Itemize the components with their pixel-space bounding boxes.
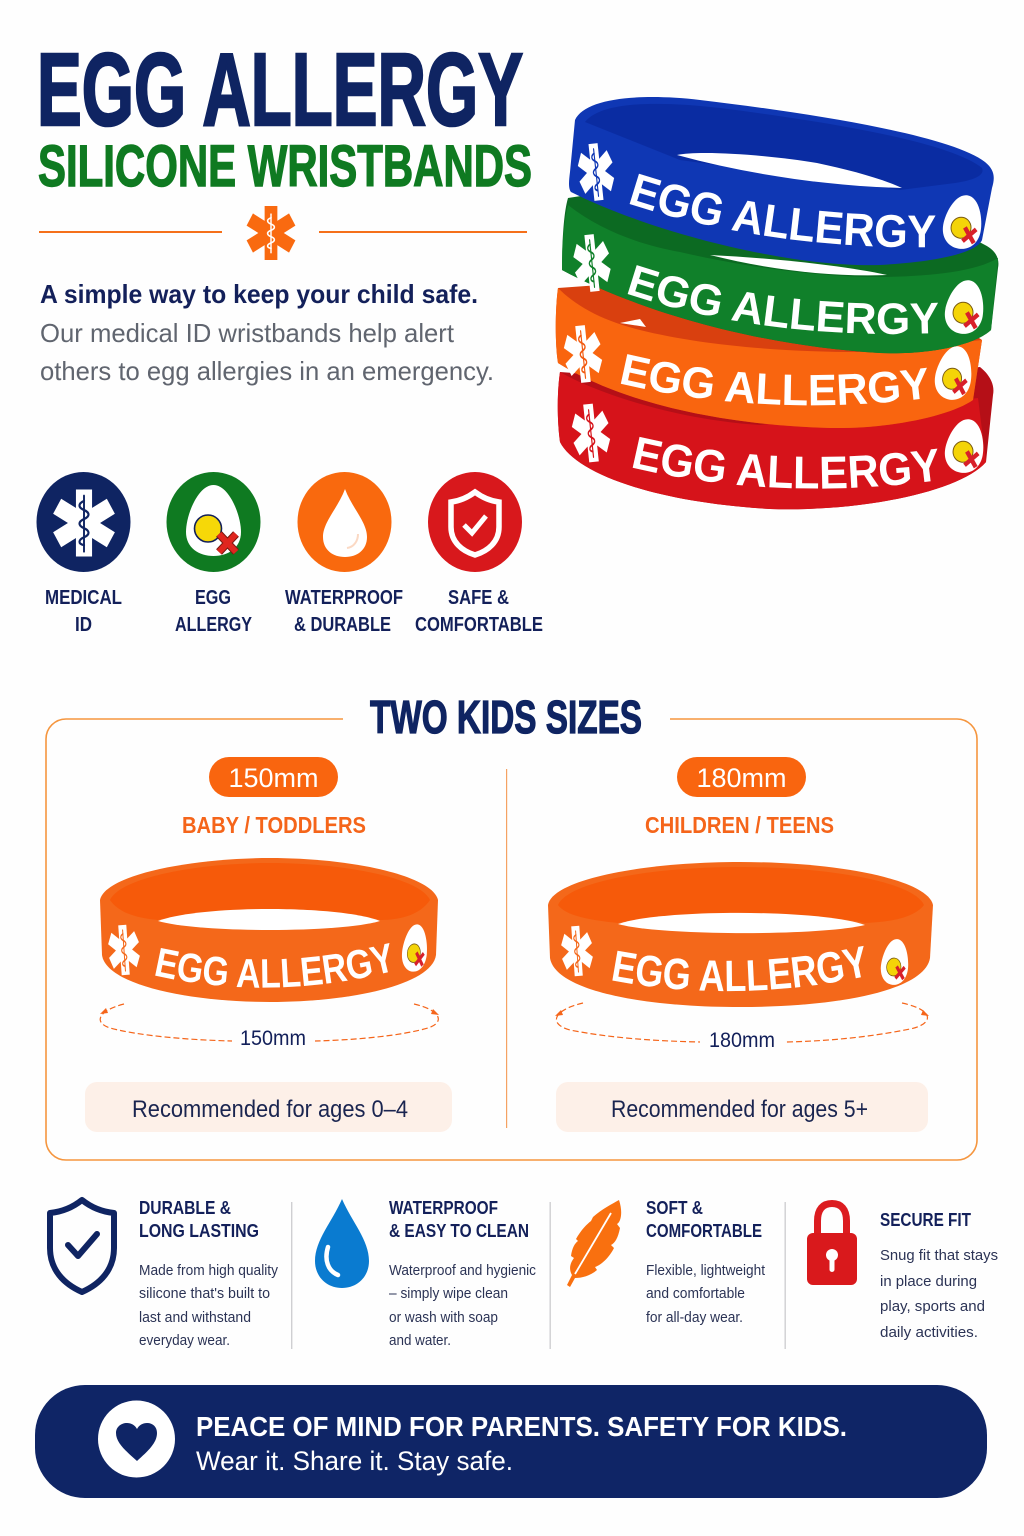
icon: waterproof bbox=[298, 472, 392, 572]
text: soft bbox=[646, 1198, 766, 1326]
text: waterproof: – simply wipe clean bbox=[389, 1285, 508, 1302]
recommendation: ages 0-4 bbox=[85, 1082, 452, 1132]
orange wristband bbox=[556, 286, 982, 428]
label: egg allergy bbox=[175, 587, 253, 636]
text: secure fit: daily activities. bbox=[880, 1324, 978, 1341]
label: children teens: CHILDREN / TEENS bbox=[645, 812, 834, 838]
size option: 180mm bbox=[548, 757, 933, 1132]
pill: 150mm: 150mm bbox=[228, 763, 319, 793]
recommendation: ages 5+ bbox=[556, 1082, 928, 1132]
label: safe and comfortable: SAFE & bbox=[448, 587, 509, 609]
text: secure fit: play, sports and bbox=[880, 1298, 985, 1315]
measure arc: 150mm bbox=[100, 1004, 439, 1050]
text: durable: Made from high quality bbox=[139, 1262, 278, 1279]
icon: padlock bbox=[807, 1204, 857, 1285]
label: egg allergy: EGG bbox=[195, 587, 231, 609]
blue wristband bbox=[569, 97, 994, 266]
text: durable: LONG LASTING bbox=[139, 1221, 259, 1241]
size option: 150mm bbox=[85, 757, 452, 1132]
label: waterproof and durable: & DURABLE bbox=[294, 614, 391, 636]
icon: egg allergy bbox=[166, 472, 260, 572]
heading: two kids sizes: TWO KIDS SIZES bbox=[370, 691, 642, 743]
benefit: waterproof bbox=[315, 1198, 536, 1349]
divider with medical star bbox=[39, 206, 527, 260]
banner text: Wear it. Share it. Stay safe. bbox=[196, 1446, 513, 1476]
wristband: 150mm: EGG ALLERGY bbox=[155, 943, 390, 988]
text: soft: for all-day wear. bbox=[646, 1309, 743, 1326]
benefit: durable bbox=[50, 1198, 278, 1349]
text: durable: silicone that's built to bbox=[139, 1285, 270, 1302]
subtitle: silicone wristbands: SILICONE WRISTBANDS bbox=[38, 134, 532, 199]
text: waterproof: & EASY TO CLEAN bbox=[389, 1221, 529, 1241]
text: waterproof: and water. bbox=[389, 1332, 451, 1349]
banner text: PEACE OF MIND FOR PARENTS. SAFETY FOR KIDS. bbox=[196, 1411, 847, 1442]
wristband: 150mm bbox=[100, 858, 438, 1002]
text: durable: last and withstand bbox=[139, 1309, 251, 1326]
label: baby toddlers: BABY / TODDLERS bbox=[182, 812, 366, 838]
icon: water drop bbox=[315, 1199, 369, 1288]
label: waterproof and durable: WATERPROOF bbox=[285, 587, 403, 609]
pill: 180mm bbox=[677, 757, 806, 797]
recommendation: ages 5+: Recommended for ages 5+ bbox=[611, 1096, 868, 1123]
text: soft: Flexible, lightweight bbox=[646, 1262, 766, 1279]
text: secure fit: Snug fit that stays bbox=[880, 1247, 998, 1264]
text: waterproof: Waterproof and hygienic bbox=[389, 1262, 536, 1279]
benefit: secure fit bbox=[807, 1204, 998, 1341]
label: medical id: ID bbox=[75, 614, 92, 636]
pill: 150mm bbox=[209, 757, 338, 797]
text: durable: everyday wear. bbox=[139, 1332, 230, 1349]
text: waterproof: or wash with soap bbox=[389, 1309, 498, 1326]
wristband: 180mm bbox=[548, 862, 933, 1007]
icon: medical id bbox=[36, 472, 130, 572]
icon: heart bbox=[98, 1400, 175, 1478]
text: secure fit bbox=[880, 1210, 998, 1341]
icon: safe shield bbox=[428, 472, 522, 572]
benefit: soft bbox=[567, 1198, 766, 1326]
panel: two kids sizes bbox=[45, 691, 978, 1161]
label: egg allergy: ALLERGY bbox=[175, 614, 253, 636]
intro text: others to egg allergies in an emergency. bbox=[40, 356, 494, 386]
measure arc: 180mm: 180mm bbox=[709, 1029, 775, 1052]
banner: peace of mind bbox=[35, 1385, 987, 1498]
blue wristband: EGG ALLERGY bbox=[630, 174, 936, 248]
label: medical id bbox=[45, 587, 122, 636]
banner text bbox=[196, 1411, 847, 1476]
text: secure fit: in place during bbox=[880, 1273, 977, 1290]
measure arc: 180mm bbox=[555, 1003, 929, 1052]
label: medical id: MEDICAL bbox=[45, 587, 122, 609]
text: waterproof bbox=[389, 1198, 536, 1349]
wristband: 180mm: EGG ALLERGY bbox=[612, 946, 864, 992]
text: soft: COMFORTABLE bbox=[646, 1221, 762, 1241]
pill: 180mm: 180mm bbox=[696, 763, 787, 793]
recommendation: ages 0-4: Recommended for ages 0–4 bbox=[132, 1096, 408, 1123]
label: waterproof and durable bbox=[285, 587, 403, 636]
label: safe and comfortable bbox=[415, 587, 543, 636]
red wristband: EGG ALLERGY bbox=[632, 436, 938, 489]
title: egg allergy: EGG ALLERGY bbox=[37, 32, 523, 147]
green wristband: EGG ALLERGY bbox=[628, 265, 938, 334]
intro text: Our medical ID wristbands help alert bbox=[40, 318, 455, 348]
text: soft: SOFT & bbox=[646, 1198, 703, 1218]
hero: stack of four wristbands bbox=[556, 97, 998, 510]
green wristband bbox=[562, 196, 998, 354]
intro text: A simple way to keep your child safe. bbox=[40, 279, 478, 309]
measure arc: 150mm: 150mm bbox=[240, 1027, 306, 1050]
feature icons row bbox=[36, 472, 543, 636]
icon: feather bbox=[567, 1200, 621, 1287]
text: durable: DURABLE & bbox=[139, 1198, 231, 1218]
intro text bbox=[40, 279, 494, 386]
icon: shield check bbox=[50, 1200, 114, 1292]
orange wristband: EGG ALLERGY bbox=[620, 354, 927, 406]
text: soft: and comfortable bbox=[646, 1285, 745, 1302]
text: secure fit: SECURE FIT bbox=[880, 1210, 971, 1230]
text: durable bbox=[139, 1198, 278, 1349]
red wristband bbox=[558, 367, 994, 510]
label: safe and comfortable: COMFORTABLE bbox=[415, 614, 543, 636]
text: waterproof: WATERPROOF bbox=[389, 1198, 498, 1218]
